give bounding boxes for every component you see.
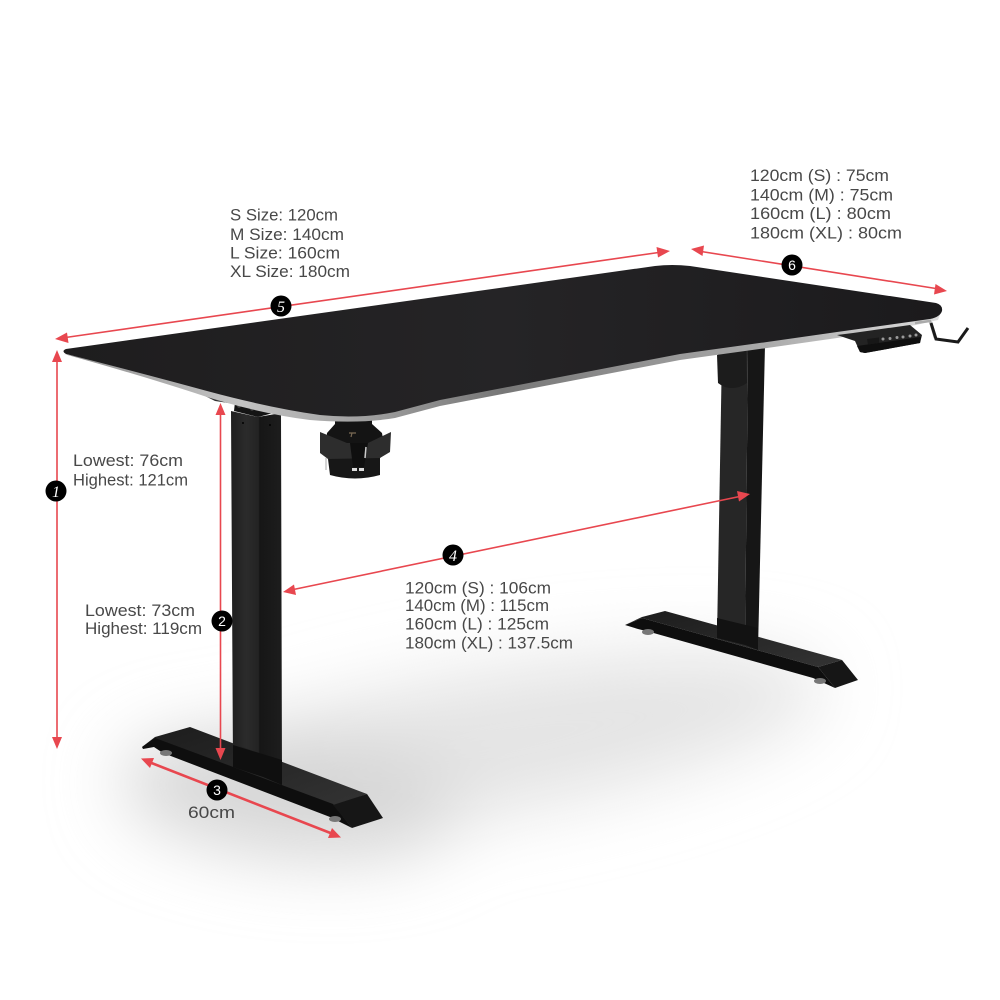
text: desk depth sizes: 160cm (L) : 80cm bbox=[750, 205, 891, 223]
text: foot depth: 60cm bbox=[188, 804, 235, 822]
text: desk depth sizes: 140cm (M) : 75cm bbox=[750, 186, 893, 204]
text: total height: Lowest: 76cm bbox=[73, 452, 183, 470]
dimension 3: foot depth: 3 bbox=[213, 782, 221, 798]
text: frame height: Lowest: 73cm bbox=[85, 602, 195, 620]
dimension 4: leg span bbox=[283, 491, 750, 595]
text: desk width sizes: XL Size: 180cm bbox=[230, 263, 350, 281]
text: desk depth sizes bbox=[750, 167, 902, 242]
text: desk width sizes: S Size: 120cm bbox=[230, 206, 338, 224]
dimension 5: desk width: 5 bbox=[277, 299, 285, 316]
text: total height bbox=[73, 452, 188, 490]
text: desk width sizes bbox=[230, 206, 350, 281]
floor shadow bbox=[114, 613, 837, 877]
left leg bbox=[203, 395, 282, 785]
desk illustration bbox=[64, 265, 968, 828]
dimension 6: desk depth bbox=[691, 246, 947, 294]
text: frame height: Highest: 119cm bbox=[85, 620, 202, 638]
dimension 2: frame height: 2 bbox=[218, 613, 226, 629]
right leg bbox=[717, 345, 765, 650]
text: leg span sizes: 160cm (L) : 125cm bbox=[405, 616, 549, 634]
text: leg span sizes: 120cm (S) : 106cm bbox=[405, 580, 551, 598]
dimension 2: frame height bbox=[212, 403, 232, 760]
text: frame height bbox=[85, 602, 202, 638]
text: desk width sizes: M Size: 140cm bbox=[230, 226, 344, 244]
cup holder bbox=[320, 415, 391, 478]
desktop underside edge bbox=[64, 310, 941, 422]
left foot bbox=[142, 727, 383, 828]
text: desk depth sizes: 120cm (S) : 75cm bbox=[750, 167, 889, 185]
tabletop bbox=[64, 265, 942, 416]
headphone hook bbox=[915, 321, 968, 342]
text: leg span sizes bbox=[405, 580, 573, 652]
dimension 1: total height bbox=[46, 350, 66, 749]
text: desk depth sizes: 180cm (XL) : 80cm bbox=[750, 224, 902, 242]
text: desk width sizes: L Size: 160cm bbox=[230, 244, 340, 262]
dimension 3: foot depth bbox=[141, 758, 341, 838]
dimension 1: total height: 1 bbox=[52, 484, 60, 501]
controller bbox=[837, 325, 922, 353]
text: total height: Highest: 121cm bbox=[73, 472, 188, 490]
dimension 5: desk width bbox=[55, 247, 670, 343]
dimension 4: leg span: 4 bbox=[449, 548, 457, 565]
text: leg span sizes: 140cm (M) : 115cm bbox=[405, 597, 549, 615]
right foot bbox=[625, 611, 858, 688]
dimension 6: desk depth: 6 bbox=[788, 257, 796, 273]
text: leg span sizes: 180cm (XL) : 137.5cm bbox=[405, 634, 573, 652]
